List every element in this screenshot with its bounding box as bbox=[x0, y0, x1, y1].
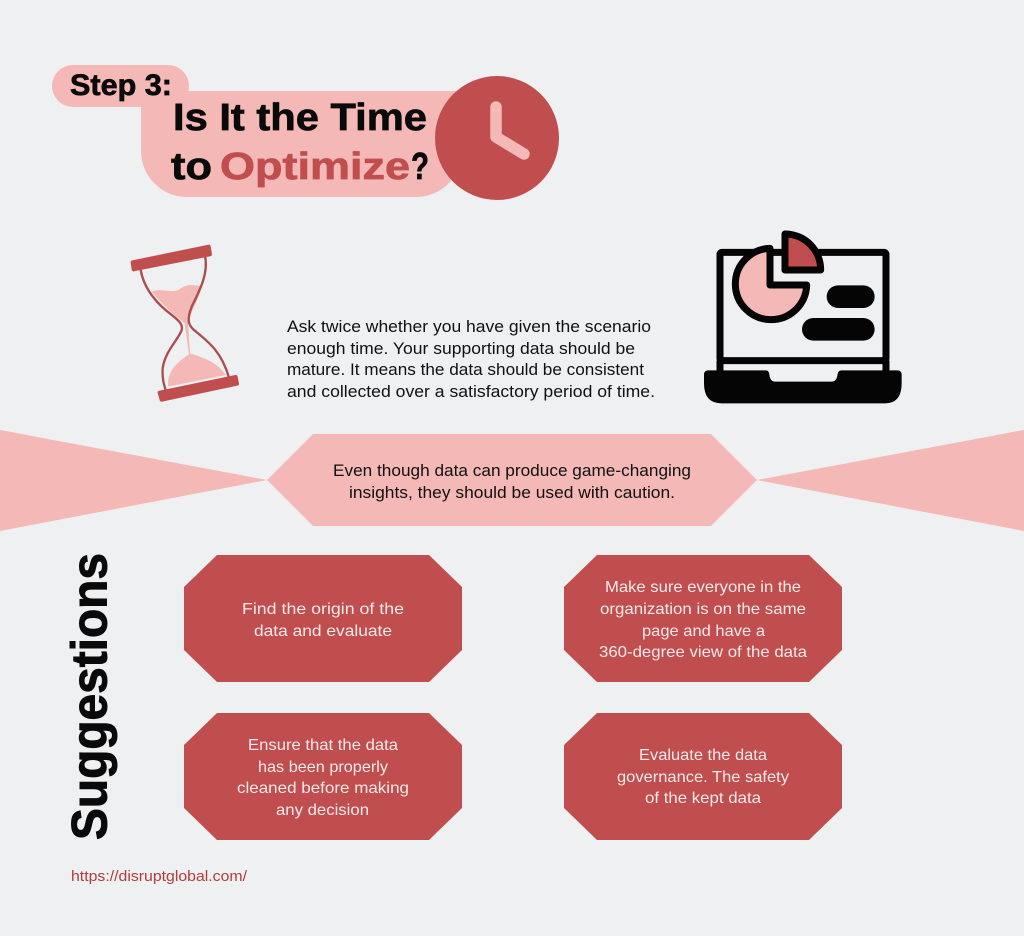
panel: data governance bbox=[564, 713, 842, 840]
panel: cleaned data: cleaned before making bbox=[237, 780, 409, 797]
top cap bbox=[133, 247, 210, 269]
icon: laptop with pie chart bbox=[704, 234, 902, 403]
panel: find the origin bbox=[184, 555, 462, 682]
icon: clock bbox=[435, 76, 559, 200]
title line two: to bbox=[171, 146, 212, 188]
banner hexagon bbox=[267, 434, 757, 526]
top sand bbox=[152, 285, 226, 387]
icon: hourglass bbox=[133, 247, 237, 400]
caution banner bbox=[0, 430, 1024, 531]
panel: same page bbox=[564, 555, 842, 682]
title line two: Optimize bbox=[220, 146, 410, 188]
panel: find the origin: Find the origin of the bbox=[242, 601, 404, 618]
panel: same page: page and have a bbox=[642, 623, 765, 640]
intro paragraph bbox=[287, 318, 655, 401]
banner text: insights, they should be used with caution. bbox=[349, 484, 675, 502]
title background bbox=[141, 91, 462, 197]
panel: same page: 360-degree view of the data bbox=[599, 644, 807, 661]
step label pill bbox=[52, 65, 189, 107]
banner text: Even though data can produce game-changing bbox=[333, 462, 691, 480]
panel: cleaned data: has been properly bbox=[258, 759, 388, 776]
panel: cleaned data: any decision bbox=[276, 802, 369, 819]
left wedge bbox=[0, 430, 267, 531]
bar one bbox=[827, 285, 875, 308]
panel: data governance: governance. The safety bbox=[617, 769, 789, 786]
panel: data governance: of the kept data bbox=[645, 790, 761, 807]
title line two: ? bbox=[411, 146, 429, 188]
panel: data governance: Evaluate the data bbox=[639, 747, 767, 764]
heading: suggestions: Suggestions bbox=[62, 553, 118, 840]
title line one: Is It the Time bbox=[173, 97, 427, 139]
laptop screen bbox=[720, 252, 886, 361]
panel: same page: organization is on the same bbox=[600, 601, 806, 618]
intro paragraph: enough time. Your supporting data should be bbox=[287, 340, 635, 358]
pie chart large slice bbox=[735, 248, 807, 320]
source link: https://disruptglobal.com/ bbox=[71, 869, 248, 885]
bottom cap bbox=[160, 377, 237, 400]
title block bbox=[52, 65, 462, 197]
right wedge bbox=[757, 430, 1024, 531]
glass left side bbox=[141, 270, 182, 391]
panel: find the origin: data and evaluate bbox=[254, 623, 392, 640]
laptop base bbox=[704, 370, 902, 403]
bar two bbox=[802, 318, 875, 341]
intro paragraph: and collected over a satisfactory period of time. bbox=[287, 383, 655, 401]
panel: same page: Make sure everyone in the bbox=[605, 579, 801, 596]
intro paragraph: mature. It means the data should be consistent bbox=[287, 361, 644, 379]
title line two bbox=[171, 146, 429, 188]
step label: Step 3: bbox=[70, 69, 172, 102]
panel: cleaned data bbox=[184, 713, 462, 840]
banner text bbox=[333, 462, 691, 502]
panel: cleaned data: Ensure that the data bbox=[248, 737, 398, 754]
glass right side bbox=[189, 256, 229, 378]
pie chart small slice bbox=[785, 234, 821, 270]
intro paragraph: Ask twice whether you have given the scenario bbox=[287, 318, 651, 336]
